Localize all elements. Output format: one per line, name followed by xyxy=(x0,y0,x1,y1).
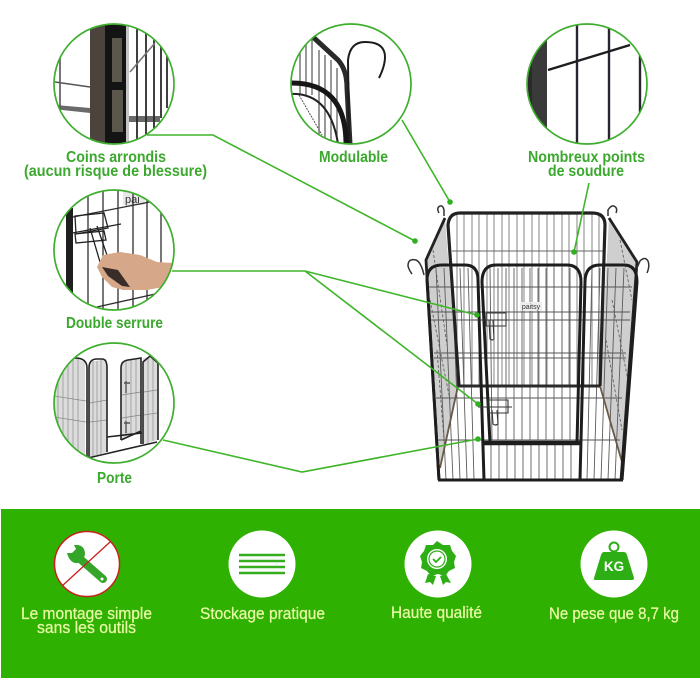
connector: porte xyxy=(163,436,481,472)
connector: modulable xyxy=(402,120,453,205)
detail circle: porte xyxy=(54,343,174,463)
detail circle: coins arrondis xyxy=(44,24,174,144)
product photo: dog pen xyxy=(408,206,649,480)
icon: quality badge xyxy=(404,530,472,598)
label: ne pese que 8,7 kg: Ne pese que 8,7 kg xyxy=(549,605,679,623)
heading: de soudure: de soudure xyxy=(548,163,624,180)
label: stockage pratique: Stockage pratique xyxy=(200,605,325,623)
connector: nombreux points de soudure xyxy=(571,183,589,255)
label: sans les outils: sans les outils xyxy=(37,619,136,637)
heading: porte: Porte xyxy=(97,470,132,487)
heading: double serrure: Double serrure xyxy=(66,315,163,332)
connector: double serrure xyxy=(172,271,481,407)
product photo: dog pen: paitsy xyxy=(522,304,541,311)
icon: crossed-out wrench xyxy=(54,532,120,596)
label: haute qualité: Haute qualité xyxy=(391,604,482,622)
icon: stacked panels xyxy=(228,530,296,598)
detail circle: double serrure: pai xyxy=(125,194,140,206)
panel: green benefits band xyxy=(1,509,700,678)
heading: modulable: Modulable xyxy=(319,149,388,166)
label: le montage simple: Le montage simple xyxy=(21,605,152,623)
icon: kg weight: KG xyxy=(604,559,624,574)
icon: kg weight xyxy=(580,530,648,598)
heading: coins arrondis: Coins arrondis xyxy=(66,149,166,166)
heading: aucun risque de blessure: (aucun risque de blessure) xyxy=(24,163,207,180)
detail circle: modulable xyxy=(290,24,411,144)
detail circle: double serrure xyxy=(54,190,174,310)
connector: coins arrondis xyxy=(147,135,418,244)
detail circle: nombreux points de soudure xyxy=(526,23,648,145)
heading: nombreux points: Nombreux points xyxy=(528,149,645,166)
